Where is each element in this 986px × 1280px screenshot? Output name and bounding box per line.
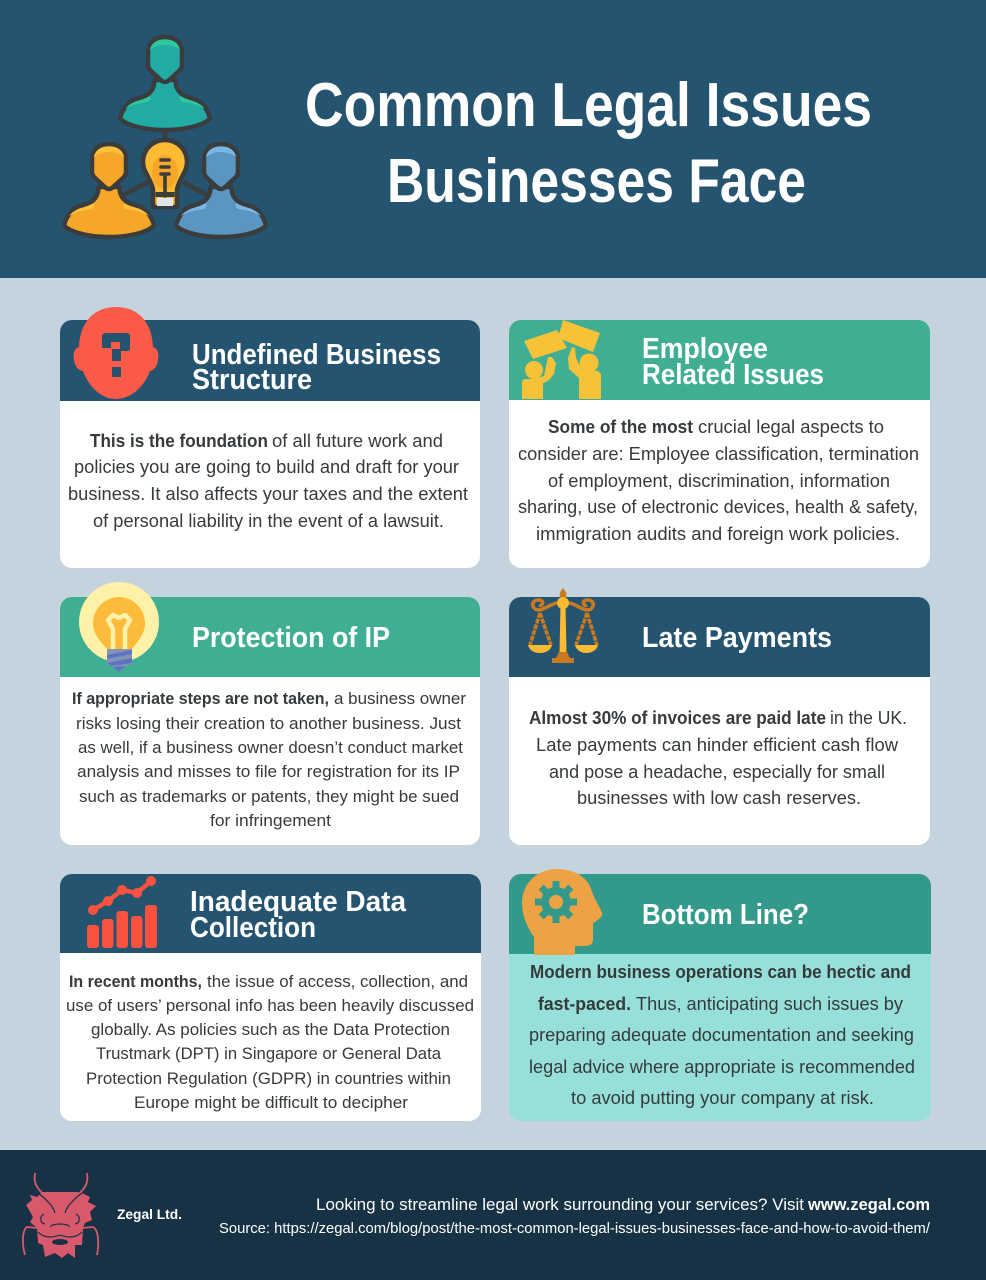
heading: Related Issues — [642, 359, 824, 391]
title — [305, 71, 872, 216]
body text: businesses with low cash reserves. — [577, 788, 861, 808]
icon: head with gear — [522, 869, 602, 955]
heading: Structure — [192, 364, 312, 396]
body text: the issue of access, collection, and — [207, 973, 468, 991]
icon: dragon head logo — [23, 1173, 98, 1258]
body text: as well, if a business owner doesn’t conduct market — [78, 739, 463, 757]
body text: such as trademarks or patents, they might be sued — [79, 788, 459, 806]
body text: of personal liability in the event of a lawsuit. — [93, 511, 444, 531]
heading: Protection of IP — [192, 622, 390, 654]
body text: use of users’ personal info has been heavily discussed — [66, 997, 474, 1015]
body text: business. It also affects your taxes and the extent — [68, 484, 468, 504]
panel: bottom line — [509, 869, 931, 1121]
icon: head with question mark — [74, 307, 158, 399]
body text: of all future work and — [272, 431, 443, 451]
body text — [518, 417, 919, 544]
body text: for infringement — [210, 812, 331, 830]
body text: a business owner — [334, 690, 467, 708]
heading — [642, 333, 824, 391]
body text: and pose a headache, especially for small — [549, 762, 885, 782]
body text: Almost 30% of invoices are paid late — [529, 708, 826, 728]
body text — [68, 431, 468, 531]
footer — [0, 1150, 986, 1280]
icon: bar and line chart — [87, 876, 157, 948]
icon: team connected by a light bulb — [64, 37, 266, 237]
header banner — [0, 0, 986, 278]
title: Common Legal Issues — [305, 71, 872, 140]
body text: policies you are going to build and draft for your — [74, 457, 459, 477]
heading: Undefined Business — [192, 339, 441, 371]
heading: Collection — [190, 912, 316, 944]
body text: risks losing their creation to another business. Just — [76, 715, 461, 733]
body text — [529, 708, 907, 808]
panel: protection of IP — [60, 582, 480, 845]
body text: preparing adequate documentation and seeking — [529, 1025, 914, 1045]
body text: Some of the most — [548, 417, 693, 437]
source line: Source: https://zegal.com/blog/post/the-most-common-legal-issues-businesses-face-and-how-to-avoid-them/ — [219, 1221, 931, 1237]
body text: This is the foundation — [90, 431, 268, 451]
panel: undefined business structure — [60, 307, 480, 568]
title: Businesses Face — [387, 147, 806, 216]
body text — [529, 962, 915, 1108]
call to action: Looking to streamline legal work surrounding your services? Visit — [316, 1196, 804, 1214]
body text — [66, 973, 474, 1112]
heading: Inadequate Data — [190, 886, 407, 918]
body text: In recent months, — [69, 973, 202, 991]
icon: protesters holding signs — [522, 320, 601, 399]
panel: employee related issues — [509, 320, 930, 568]
body text: globally. As policies such as the Data Protection — [91, 1021, 450, 1039]
body text: Europe might be difficult to decipher — [134, 1094, 409, 1112]
heading — [190, 886, 407, 944]
heading: Bottom Line? — [642, 899, 809, 931]
icon: glowing light bulb — [79, 582, 159, 672]
company name: Zegal Ltd. — [117, 1206, 182, 1222]
heading: Employee — [642, 333, 768, 365]
body text: analysis and misses to file for registration for its IP — [77, 763, 460, 781]
body text: Trustmark (DPT) in Singapore or General Data — [96, 1045, 442, 1063]
body text: Thus, anticipating such issues by — [636, 994, 903, 1014]
panel: inadequate data collection — [60, 874, 481, 1121]
heading: Late Payments — [642, 622, 832, 654]
body text: legal advice where appropriate is recommended — [529, 1057, 915, 1077]
icon: balance scales — [528, 588, 598, 663]
body text: If appropriate steps are not taken, — [72, 690, 329, 708]
panel: late payments — [509, 588, 930, 845]
body text: Protection Regulation (GDPR) in countries within — [86, 1070, 451, 1088]
body text: crucial legal aspects to — [698, 417, 884, 437]
body text: Modern business operations can be hectic and — [530, 962, 911, 982]
body text: of employment, discrimination, information — [548, 471, 890, 491]
heading — [192, 339, 441, 396]
body text: Late payments can hinder efficient cash flow — [536, 735, 899, 755]
call to action: www.zegal.com — [807, 1196, 930, 1214]
body text: in the UK. — [830, 708, 907, 728]
body text: to avoid putting your company at risk. — [571, 1088, 874, 1108]
body text: immigration audits and foreign work policies. — [536, 524, 900, 544]
body text: fast-paced. — [538, 994, 631, 1014]
body text — [72, 690, 467, 830]
body text: consider are: Employee classification, termination — [518, 444, 919, 464]
body text: sharing, use of electronic devices, health & safety, — [518, 497, 918, 517]
